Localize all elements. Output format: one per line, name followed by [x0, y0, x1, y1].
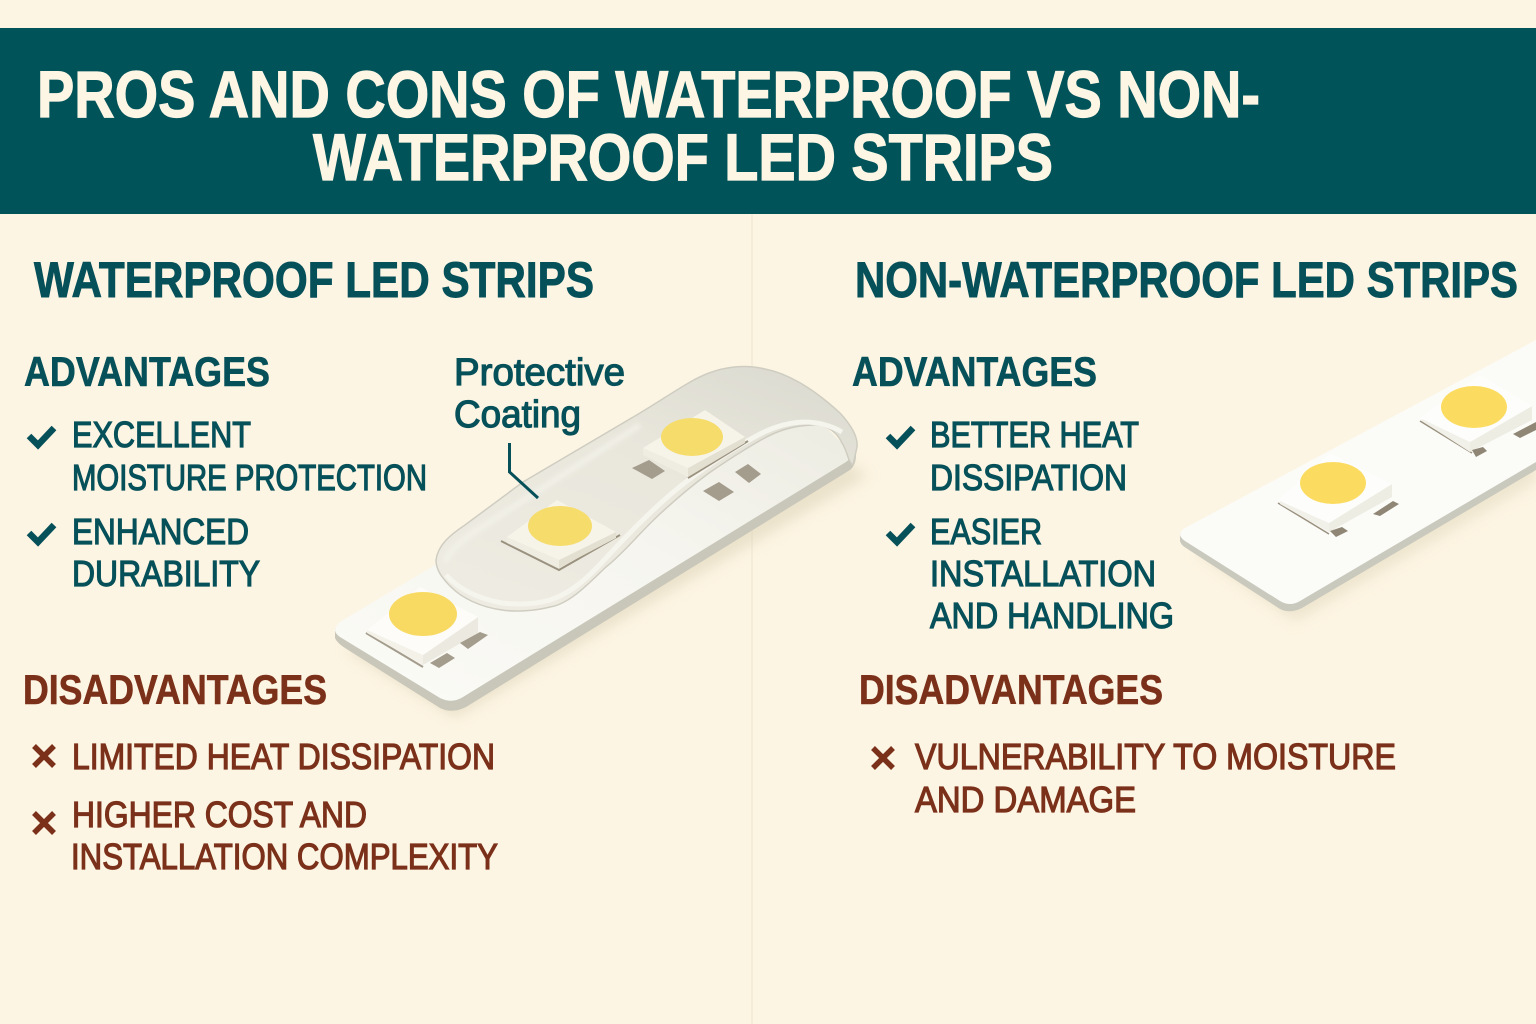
- LED chip: lower: [1278, 453, 1399, 537]
- callout: protective coating: Protective: [454, 352, 625, 394]
- callout: protective coating: [454, 352, 625, 498]
- LED chip: coated lower: [501, 500, 620, 570]
- LED chip: uncoated: [366, 587, 488, 668]
- LED chip: coated upper: [643, 410, 748, 478]
- item: moisture protection: [72, 414, 427, 498]
- item: moisture protection: MOISTURE PROTECTION: [72, 457, 427, 498]
- item: heat dissipation: BETTER HEAT: [930, 414, 1139, 455]
- item: cost and complexity: [71, 794, 498, 877]
- disadvantages: waterproof: [23, 666, 498, 877]
- item: heat dissipation: [930, 414, 1139, 498]
- center divider: [751, 214, 753, 1024]
- item: vulnerability: [915, 736, 1396, 820]
- LED chip: upper: [1420, 375, 1536, 457]
- icon: check: [888, 428, 913, 445]
- advantages: non-waterproof: [852, 348, 1174, 636]
- advantages: non-waterproof: ADVANTAGES: [852, 348, 1097, 395]
- item: vulnerability: AND DAMAGE: [915, 779, 1136, 820]
- item: cost and complexity: INSTALLATION COMPLEXITY: [71, 836, 498, 877]
- panel: waterproof LED strips: [23, 252, 870, 877]
- item: installation and handling: [930, 511, 1174, 636]
- item: vulnerability: VULNERABILITY TO MOISTURE: [915, 736, 1396, 777]
- item: heat dissipation: LIMITED HEAT DISSIPATION: [72, 736, 495, 777]
- item: moisture protection: EXCELLENT: [72, 414, 251, 455]
- title banner: [0, 28, 1536, 214]
- title banner: PROS AND CONS OF WATERPROOF VS NON-: [37, 57, 1260, 131]
- callout: protective coating: Coating: [454, 394, 581, 436]
- icon: cross: [34, 746, 54, 766]
- item: durability: ENHANCED: [72, 511, 249, 552]
- disadvantages: non-waterproof: DISADVANTAGES: [859, 666, 1163, 713]
- item: heat dissipation: DISSIPATION: [930, 457, 1127, 498]
- heading: waterproof: WATERPROOF LED STRIPS: [34, 252, 594, 308]
- advantages: waterproof: ADVANTAGES: [24, 348, 270, 395]
- advantages: waterproof: [24, 348, 427, 594]
- item: installation and handling: AND HANDLING: [930, 595, 1174, 636]
- disadvantages: non-waterproof: [859, 666, 1396, 820]
- item: durability: [72, 511, 260, 594]
- item: cost and complexity: HIGHER COST AND: [72, 794, 367, 835]
- icon: check: [29, 428, 54, 445]
- illustration: waterproof LED strip with coating: [335, 366, 870, 718]
- solder pads: [632, 460, 761, 501]
- icon: cross: [873, 748, 893, 768]
- item: installation and handling: EASIER: [930, 511, 1042, 552]
- icon: cross: [34, 813, 54, 833]
- item: installation and handling: INSTALLATION: [930, 553, 1156, 594]
- icon: check: [29, 525, 54, 542]
- disadvantages: waterproof: DISADVANTAGES: [23, 666, 327, 713]
- title banner: WATERPROOF LED STRIPS: [313, 120, 1053, 194]
- illustration: bare LED strip: [1180, 340, 1536, 622]
- panel: non-waterproof LED strips: [852, 252, 1536, 820]
- item: durability: DURABILITY: [72, 553, 260, 594]
- icon: check: [888, 525, 913, 542]
